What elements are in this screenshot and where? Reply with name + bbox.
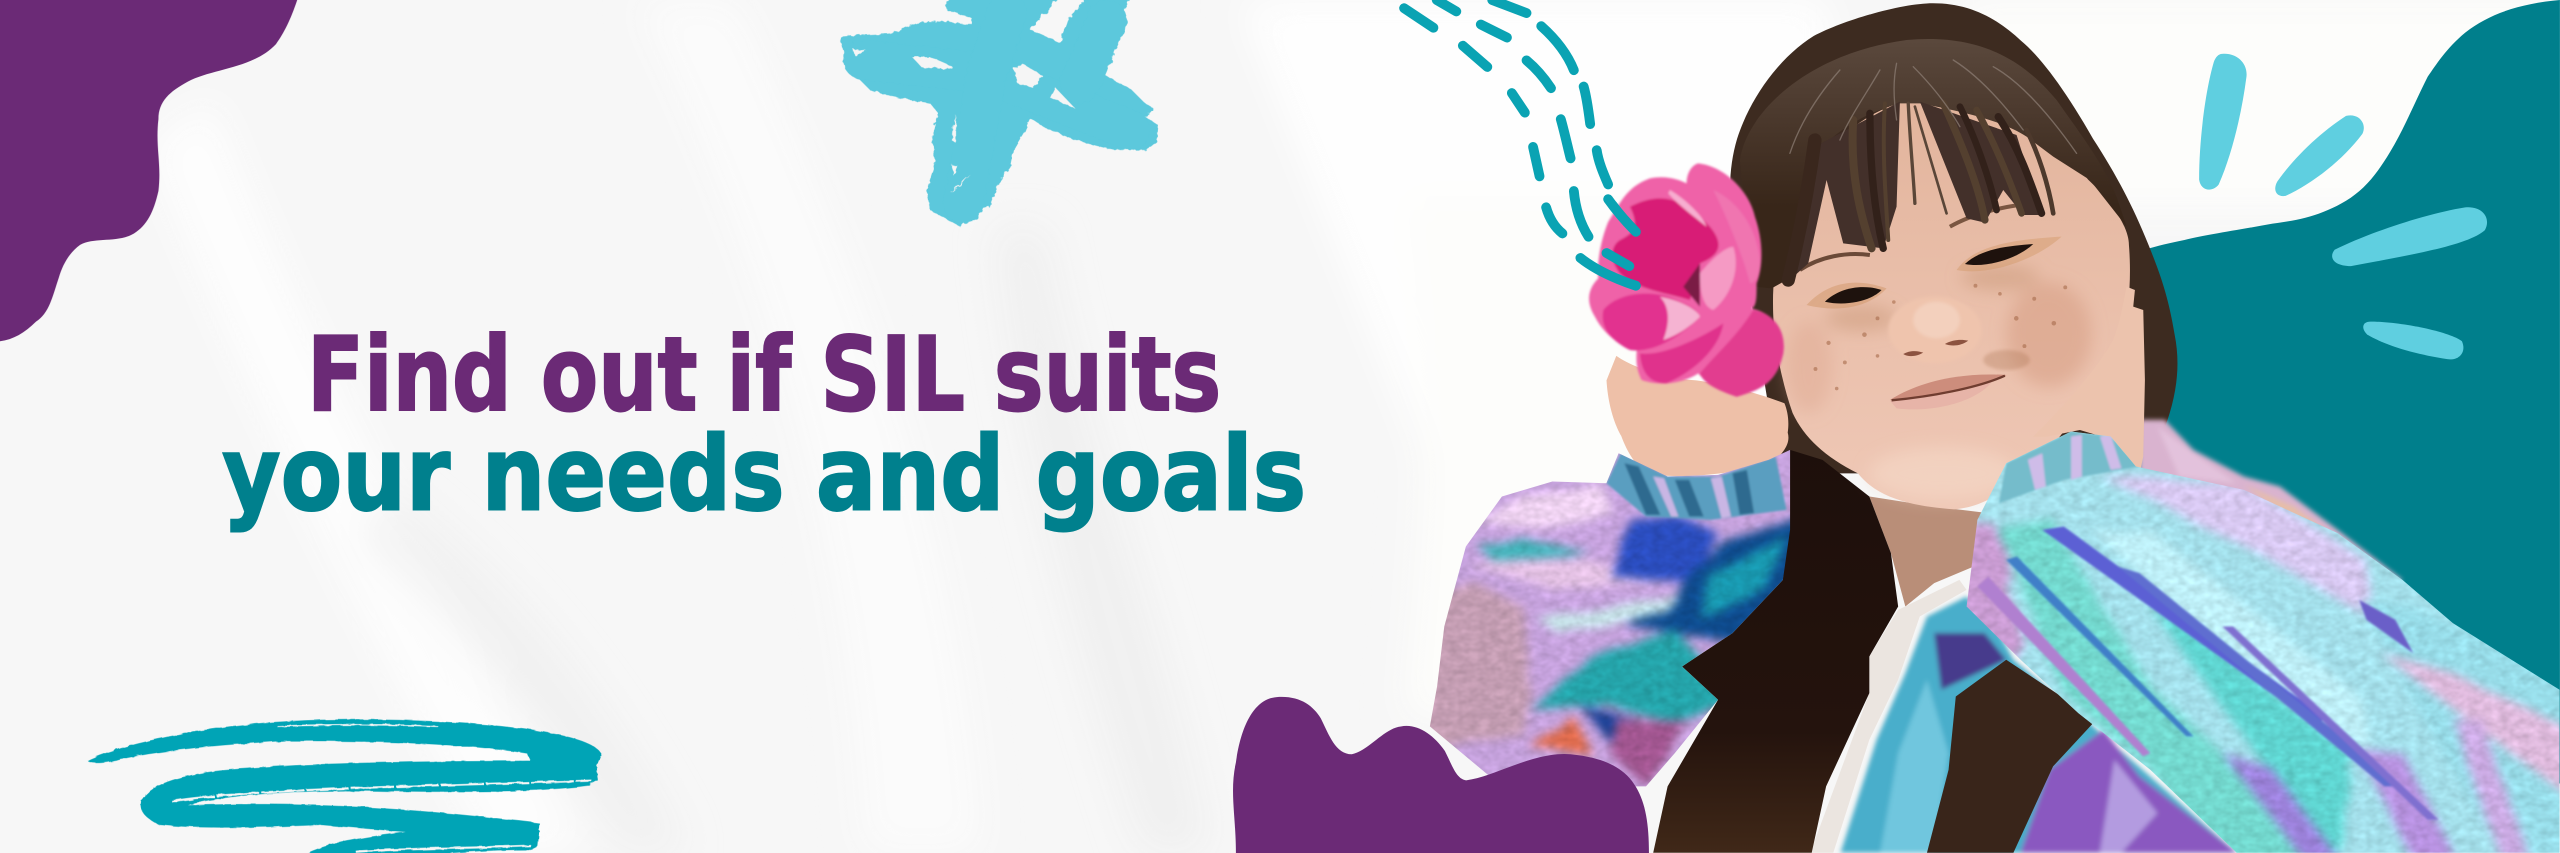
blob: purple bottom [1233,697,1649,853]
left sleeve colours [1430,450,1790,786]
left hand [1607,356,1788,476]
dashed teal trail [1404,0,1636,286]
hair back [1730,3,2177,473]
brush scribble: teal bottom left [87,719,601,853]
sleeve creases and gathered cuffs [1606,432,2438,820]
blob: purple top left [0,0,297,341]
fringe [1740,39,2127,288]
neck, zip placket and long hair [1653,450,2096,853]
hand on cheek [2033,287,2145,480]
freckles [1814,284,2067,390]
face [1773,98,2130,509]
nose and mouth [1888,297,2030,409]
heading: Find out if SIL suits [307,316,1221,435]
icon: hand-drawn blue star [840,0,1158,227]
jacket sleeves [1430,432,2560,853]
jacket torso [1841,420,2402,853]
flower [1589,163,1784,397]
right sleeve colours [1956,400,2560,853]
icon: light blue burst marks [2199,54,2487,359]
photo: young woman with flower and iridescent jacket [1387,3,2560,853]
blob: teal right [2122,0,2560,784]
heading: your needs and goals [222,415,1306,534]
eyes and brows [1800,203,2062,309]
cheek shading [1786,264,2091,500]
